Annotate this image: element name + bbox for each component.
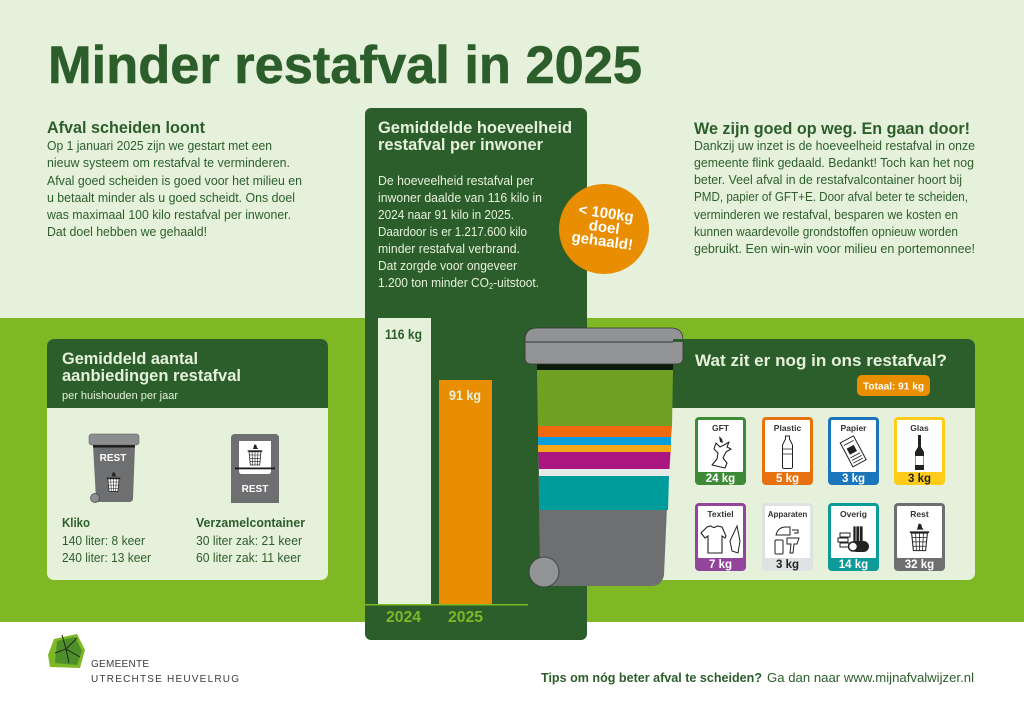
panel text: 2 (489, 282, 494, 291)
icon: verzamelcontainer (231, 434, 279, 503)
icon: kliko: REST (100, 453, 126, 464)
panel heading: Gemiddelde hoeveelheid (378, 118, 572, 137)
total pill: Totaal: 91 kg (863, 380, 924, 392)
panel text: De hoeveelheid restafval per (378, 174, 534, 188)
panel text: -uitstoot. (493, 276, 539, 290)
panel text: 1.200 ton minder CO (378, 276, 494, 290)
card: glas: 3 kg (908, 473, 931, 485)
text: verzamelcontainer: Verzamelcontainer (196, 516, 305, 530)
text block: goed op weg: beter. Veel afval in de restafvalcontainer hoort bij (694, 173, 962, 187)
card: overig: 14 kg (839, 559, 868, 571)
illustration: waste bin (525, 328, 684, 587)
panel heading: aanbiedingen restafval (62, 366, 241, 385)
bar chart: 116 kg (385, 327, 422, 342)
badge: doel gehaald: < 100kg (578, 201, 635, 226)
card: plastic: 5 kg (776, 473, 799, 485)
panel: wat zit er in restafval (650, 339, 975, 580)
text: kliko: Kliko (62, 516, 90, 530)
card: rest (894, 503, 945, 571)
panel heading (62, 349, 241, 402)
bar chart: 91 kg (449, 388, 481, 403)
card: rest: 32 kg (905, 559, 934, 571)
text block: afval scheiden loont: Afval goed scheiden is goed voor het milieu en (47, 174, 302, 188)
text: kliko: 240 liter: 13 keer (62, 551, 151, 565)
text block: afval scheiden loont: u betaalt minder als u goed scheidt. Ons doel (47, 191, 295, 205)
footer text (541, 671, 974, 685)
text: verzamelcontainer (196, 516, 305, 565)
footer text: Ga dan naar www.mijnafvalwijzer.nl (767, 671, 974, 685)
title: Minder restafval in 2025 (48, 36, 642, 95)
panel heading: Gemiddeld aantal (62, 349, 198, 368)
card: textiel: 7 kg (709, 559, 732, 571)
card: apparaten: Apparaten (768, 510, 807, 519)
badge: doel gehaald (559, 184, 649, 274)
panel text: inwoner daalde van 116 kilo in (378, 191, 542, 205)
footer text: Tips om nóg beter afval te scheiden? (541, 671, 762, 685)
panel: aanbiedingen restafval (47, 339, 328, 580)
card: GFT: GFT (712, 423, 730, 433)
card: apparaten: 3 kg (776, 559, 799, 571)
icon: verzamelcontainer: REST (242, 484, 268, 495)
card: GFT (695, 417, 746, 485)
bar chart (365, 318, 528, 626)
card: papier: Papier (840, 423, 867, 433)
text: kliko: 140 liter: 8 keer (62, 534, 145, 548)
card: glas (894, 417, 945, 485)
text: verzamelcontainer: 30 liter zak: 21 keer (196, 534, 302, 548)
panel text: minder restafval verbrand. (378, 242, 520, 256)
card: plastic: Plastic (774, 423, 801, 433)
text block: afval scheiden loont: Dat doel hebben we gehaald! (47, 225, 207, 239)
text block: goed op weg: Dankzij uw inzet is de hoeveelheid restafval in onze (694, 139, 975, 153)
logo text: UTRECHTSE HEUVELRUG (91, 674, 239, 685)
text: kliko (62, 516, 151, 565)
text block: goed op weg: PMD, papier of GFT+E. Door afval beter te scheiden, (694, 190, 968, 204)
card: papier: 3 kg (842, 473, 865, 485)
card: GFT: 24 kg (706, 473, 735, 485)
logo text (91, 659, 239, 685)
text block: goed op weg: kunnen waardevolle grondstoffen opnieuw worden (694, 225, 958, 239)
card: overig: Overig (840, 509, 867, 519)
panel heading (378, 118, 572, 154)
card: rest: Rest (910, 509, 929, 519)
bar chart: 2024 (386, 609, 421, 626)
panel heading: restafval per inwoner (378, 135, 543, 154)
text block: afval scheiden loont: was maximaal 100 kilo restafval per inwoner. (46, 208, 291, 222)
logo text: GEMEENTE (91, 659, 149, 670)
logo (48, 634, 239, 685)
text block: afval scheiden loont: Op 1 januari 2025 zijn we gestart met een (47, 139, 272, 153)
panel heading: Wat zit er nog in ons restafval? (695, 351, 947, 370)
card: apparaten (762, 503, 813, 571)
panel: gemiddelde hoeveelheid (365, 108, 587, 640)
card: glas: Glas (910, 423, 929, 433)
bar chart: 2025 (448, 609, 483, 626)
badge: doel gehaald: doel (588, 217, 621, 238)
text block: afval scheiden loont (46, 118, 302, 239)
text block: goed op weg (694, 119, 975, 256)
icon: kliko (89, 434, 139, 502)
panel text (378, 174, 542, 291)
text block: goed op weg: gebruikt. Een win-win voor milieu en portemonnee! (694, 242, 975, 256)
card: overig (828, 503, 879, 571)
card: textiel: Textiel (707, 509, 734, 519)
card: plastic (762, 417, 813, 485)
badge: doel gehaald: gehaald! (571, 229, 634, 254)
text block: afval scheiden loont: nieuw systeem om restafval te verminderen. (47, 156, 290, 170)
panel text: Dat zorgde voor ongeveer (378, 259, 517, 273)
text block: goed op weg: verminderen we restafval, besparen we kosten en (694, 208, 958, 222)
panel heading: per huishouden per jaar (62, 390, 178, 402)
panel text: 2024 naar 91 kilo in 2025. (378, 208, 514, 222)
text block: afval scheiden loont: Afval scheiden loont (47, 118, 205, 137)
panel text: Daardoor is er 1.217.600 kilo (378, 225, 527, 239)
text: verzamelcontainer: 60 liter zak: 11 keer (196, 551, 301, 565)
text block: goed op weg: We zijn goed op weg. En gaan door! (694, 119, 970, 138)
card: textiel (695, 503, 746, 571)
total pill (857, 375, 930, 396)
card: papier (828, 417, 879, 485)
text block: goed op weg: gemeente flink gedaald. Bedankt! Toch kan het nog (694, 156, 974, 170)
